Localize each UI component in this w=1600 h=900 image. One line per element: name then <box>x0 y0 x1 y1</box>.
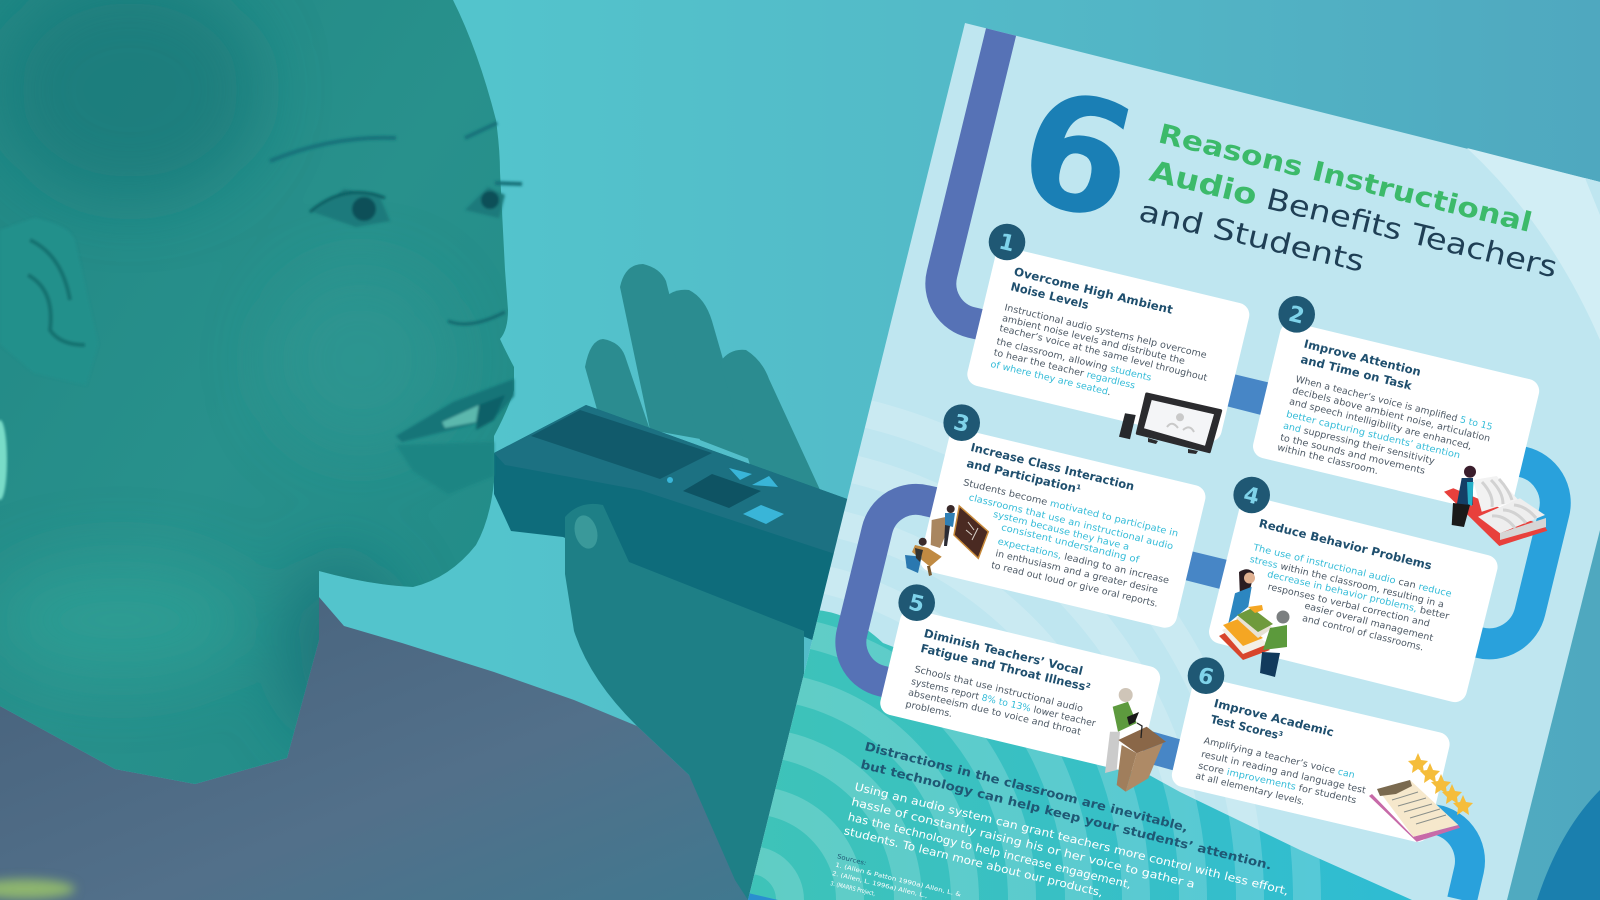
bottom right background blob <box>1537 790 1600 900</box>
badge 2: 2 <box>1286 302 1307 330</box>
card 3 body: Students become motivated to participate in <box>962 477 1179 540</box>
card 2 body: and suppressing their sensitivity <box>1282 421 1436 467</box>
poster sheet <box>748 23 1600 900</box>
closing statement: but technology can help keep your students’ attention. <box>859 757 1273 873</box>
poster <box>748 23 1600 900</box>
badge 6: 6 <box>1195 663 1216 691</box>
closing statement <box>859 739 1273 873</box>
card 4 body: and control of classrooms. <box>1301 613 1425 654</box>
card 2 title: and Time on Task <box>1299 352 1414 393</box>
card 1 body: ambient noise levels and distribute the <box>1001 313 1186 367</box>
badge 4 <box>1233 477 1270 513</box>
card 6 body: at all elementary levels. <box>1194 771 1306 808</box>
card 6 body <box>1194 736 1367 808</box>
card 1 body: the classroom, allowing students <box>995 336 1153 384</box>
card 3 body <box>962 477 1179 610</box>
card 1 body: Instructional audio systems help overcome <box>1003 302 1208 361</box>
connector card 1 to 2 <box>1218 372 1275 416</box>
closing statement: Distractions in the classroom are inevitable, <box>863 739 1190 835</box>
badge 6 <box>1188 657 1224 694</box>
card 2 body: within the classroom. <box>1276 442 1379 477</box>
big number 6: 6 <box>1003 55 1152 258</box>
badge 3: 3 <box>951 410 972 438</box>
card 6 body: score improvements for students <box>1197 760 1358 806</box>
card 1 <box>965 224 1252 454</box>
purple path from card 3 to card 5 <box>851 499 955 692</box>
card 5 title: Diminish Teachers’ Vocal <box>923 626 1084 678</box>
closing paragraph: hassle of constantly raising his or her voice to gather a <box>850 795 1196 891</box>
bottom left highlights <box>0 420 75 899</box>
card 2 <box>1251 296 1542 517</box>
badge 5 <box>898 584 935 621</box>
photo: student speaking into microphone <box>0 0 850 900</box>
hand fingers <box>585 264 821 492</box>
sources: Sources: <box>836 853 867 867</box>
connector card 3 to 4 <box>1165 546 1240 592</box>
hand palm and thumb <box>565 504 804 900</box>
card 6 title: Test Scores³ <box>1209 712 1284 743</box>
card 4 body: stress within the classroom, resulting in a <box>1249 554 1445 610</box>
card 4 <box>1206 477 1500 705</box>
card 4 body <box>1249 542 1453 654</box>
closing paragraph: Using an audio system can grant teachers more control with less effort, <box>853 780 1290 898</box>
card 1 body: teacher’s voice at the same level throughout <box>998 323 1209 384</box>
sources: 1. (Allen & Patton 1990a) Allen, L. & <box>835 862 962 899</box>
heading: Audio Benefits Teachers <box>1146 154 1561 284</box>
blue path from card 6 off poster <box>1400 812 1470 900</box>
top right corner shape <box>1585 178 1600 215</box>
icon: teacher and student with books <box>1219 569 1290 677</box>
connector card 5 to 6 <box>1125 725 1200 775</box>
card 5 body: absenteeism due to voice and throat <box>907 687 1082 738</box>
card 1 body <box>989 302 1209 398</box>
card 4 body: decrease in behavior problems, better <box>1266 569 1450 622</box>
card 2 title: Improve Attention <box>1303 337 1422 379</box>
card 3 body: in enthusiasm and a greater desire <box>994 548 1159 596</box>
card 4 body: easier overall management <box>1303 601 1435 644</box>
blue path from card 2 to card 4 <box>1455 457 1555 644</box>
card 2 body: to the sounds and movements <box>1279 432 1426 477</box>
badge 1 <box>989 224 1025 260</box>
card 5 body <box>904 664 1097 738</box>
microphone device <box>494 405 850 645</box>
mouth <box>396 379 514 494</box>
card 6 body: Amplifying a teacher’s voice can <box>1203 736 1356 781</box>
card 3 <box>905 404 1208 630</box>
badge 5: 5 <box>906 590 927 618</box>
sources: 3. (MARRS Project, <box>830 880 876 898</box>
card 4 title: Reduce Behavior Problems <box>1258 516 1434 573</box>
icon: clipboard and stars <box>1369 753 1473 842</box>
badge 3 <box>943 404 980 441</box>
heading: Reasons Instructional <box>1155 119 1535 239</box>
card 6 <box>1169 657 1452 844</box>
card 2 body: When a teacher’s voice is amplified 5 to 15 <box>1294 374 1494 433</box>
heading <box>1136 119 1561 284</box>
card 3 body: consistent understanding of <box>1000 522 1141 566</box>
card 2 body: and speech intelligibility are enhanced, <box>1288 396 1473 452</box>
card 3 body: classrooms that use an instructional audio <box>968 492 1175 552</box>
stars <box>1408 753 1473 815</box>
card 2 body: decibels above ambient noise, articulation <box>1291 385 1492 445</box>
card 2 body: better capturing students’ attention <box>1285 409 1461 461</box>
card 5 title: Fatigue and Throat Illness² <box>919 641 1092 695</box>
hair and skin shading <box>20 0 392 722</box>
card 1 title: Noise Levels <box>1009 279 1090 312</box>
card 3 title: and Participation¹ <box>965 456 1082 496</box>
card 1 title: Overcome High Ambient <box>1013 264 1175 317</box>
card 6 body: result in reading and language test <box>1200 749 1367 796</box>
card 2 body <box>1276 374 1494 477</box>
card 4 body: responses to verbal correction and <box>1267 582 1431 630</box>
badge 2 <box>1278 296 1315 333</box>
sources <box>830 853 962 900</box>
card 5 <box>878 584 1163 774</box>
card 5 body: Schools that use instructional audio <box>913 664 1085 715</box>
thumbnail <box>571 513 601 551</box>
icon: tablet and remote <box>1119 394 1221 454</box>
shirt <box>0 597 752 900</box>
sources: 2. (Allen, L. 1996a) Allen, L., <box>831 870 928 900</box>
light ripple rings <box>824 400 1259 830</box>
ear <box>0 218 98 385</box>
card 5 body: problems. <box>904 699 953 720</box>
card 6 title: Improve Academic <box>1213 696 1335 739</box>
badge 1: 1 <box>996 230 1017 257</box>
card 3 body: system because they have a <box>992 509 1130 553</box>
icon: open book and reader <box>1444 466 1547 546</box>
closing paragraph: has the technology to help increase engagement, <box>847 810 1132 891</box>
face and neck <box>0 0 514 784</box>
heading: and Students <box>1136 194 1368 279</box>
eyes and brows <box>270 123 522 324</box>
icon: lectern and speaker <box>1105 688 1166 792</box>
top right lighter shape <box>1467 148 1600 340</box>
icon: classroom teacher, blackboard and student <box>905 505 988 576</box>
card 5 body: systems report 8% to 13% lower teacher <box>910 676 1097 729</box>
card 1 body: to hear the teacher regardless <box>993 347 1136 392</box>
closing paragraph: students. To learn more about our products, <box>843 824 1104 899</box>
card 3 title: Increase Class Interaction <box>969 440 1136 493</box>
card 1 body: of where they are seated . <box>989 359 1112 398</box>
card 3 body: to read out loud or give oral reports. <box>990 560 1159 610</box>
card 3 body: expectations, leading to an increase <box>997 536 1170 586</box>
purple path from top to card 1 <box>941 24 1003 329</box>
teal wave <box>748 610 1412 900</box>
badge 4: 4 <box>1241 483 1262 510</box>
card 4 body: The use of instructional audio can reduce <box>1251 542 1453 600</box>
